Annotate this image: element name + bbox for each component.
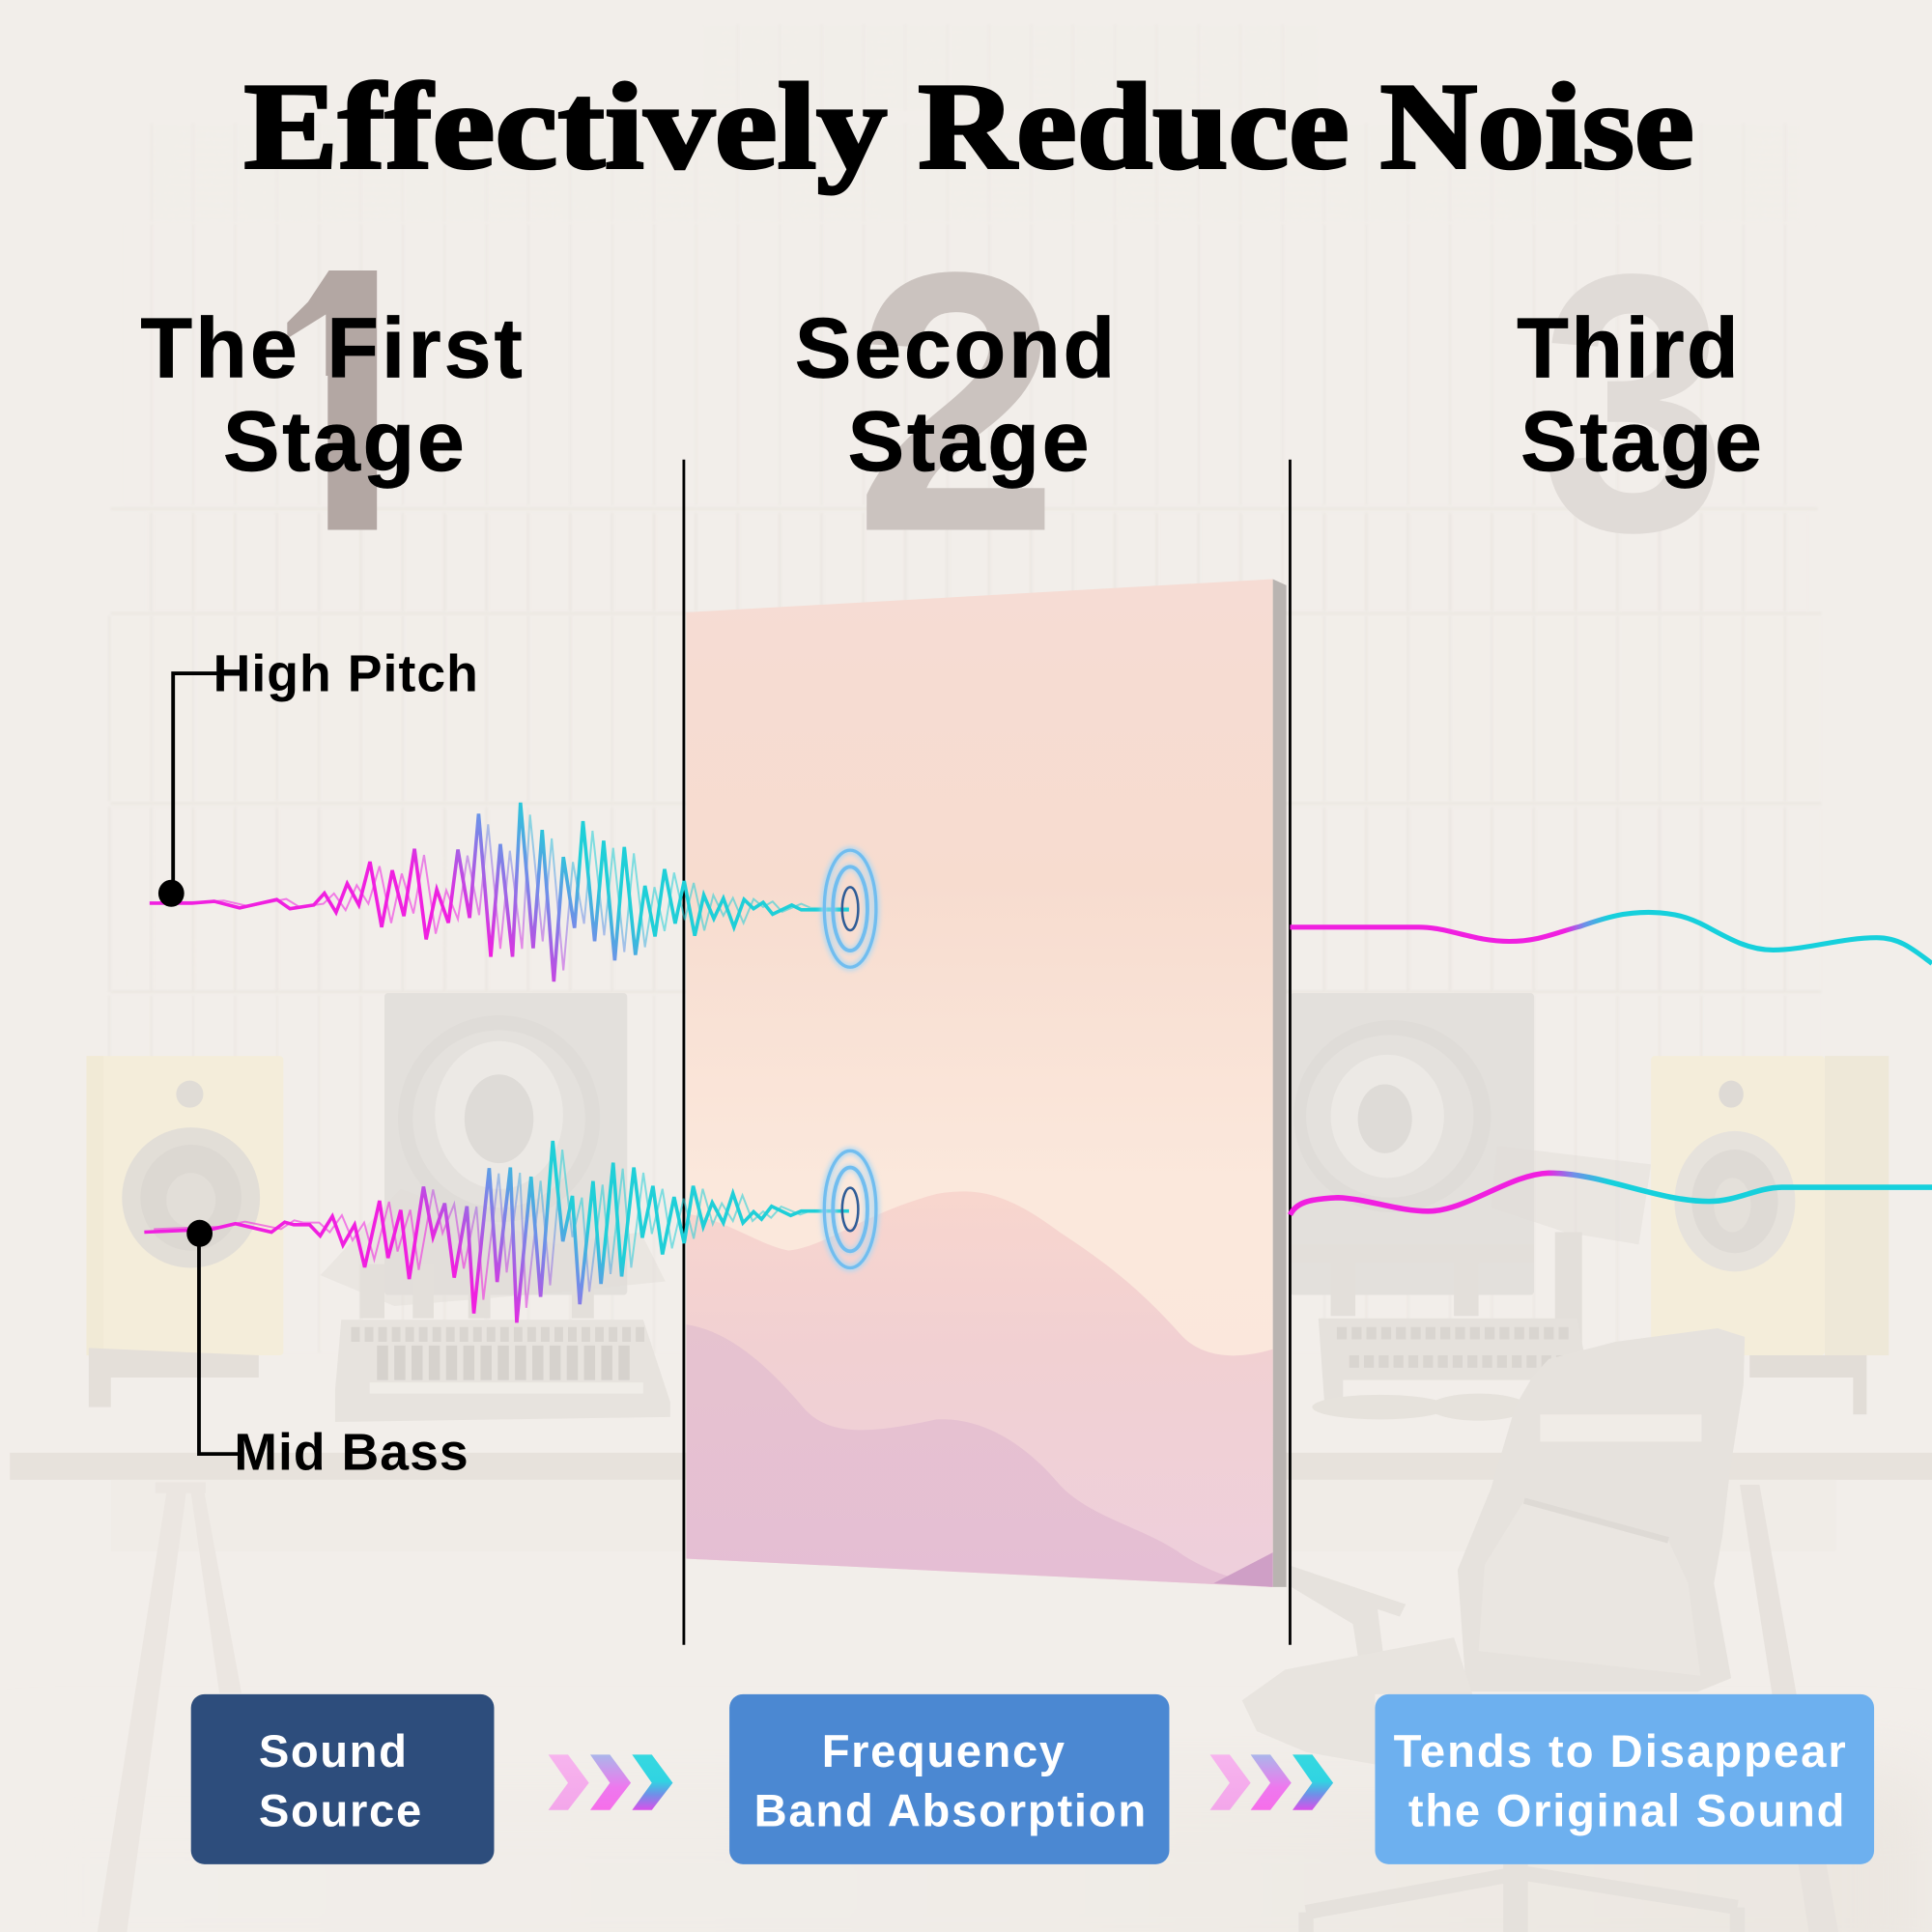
stage number 1: 1 xyxy=(238,188,447,610)
acoustic panel xyxy=(686,579,1287,1587)
stage number 3: 3 xyxy=(1540,197,1727,608)
box: tends to disappear xyxy=(1375,1694,1874,1864)
heading: second stage: Stage xyxy=(848,393,1090,489)
title: Effectively xyxy=(244,57,887,194)
high pitch waveform xyxy=(150,803,849,981)
heading: second stage: Second xyxy=(795,299,1115,395)
left keyboard xyxy=(335,1320,670,1422)
arrows: absorption to disappearing xyxy=(1210,1754,1333,1810)
stage number 2: 2 xyxy=(854,196,1060,609)
heading: first stage xyxy=(140,299,523,489)
box: tends to disappear: Tends to Disappear xyxy=(1394,1726,1846,1777)
residual wave: lower xyxy=(1290,1173,1932,1215)
box: sound source xyxy=(191,1694,494,1864)
title: Reduce xyxy=(918,57,1350,194)
rings: lower absorption point xyxy=(824,1151,876,1267)
desk top xyxy=(10,1453,1932,1480)
box: frequency band absorption: Band Absorption xyxy=(754,1785,1146,1836)
box: sound source: Source xyxy=(259,1785,421,1836)
callout: high pitch: High Pitch xyxy=(213,646,478,703)
right black speaker xyxy=(1290,993,1534,1295)
heading: third stage: Third xyxy=(1517,299,1739,395)
title: Noise xyxy=(1380,57,1694,194)
stage dividers xyxy=(684,460,1290,1645)
heading: first stage: Stage xyxy=(223,393,465,489)
box: sound source: Sound xyxy=(259,1726,407,1777)
right yellow speaker xyxy=(1651,1056,1825,1355)
box: tends to disappear: the Original Sound xyxy=(1408,1785,1844,1836)
callout: mid bass xyxy=(186,1220,469,1482)
residual wave: upper xyxy=(1290,912,1932,963)
left yellow speaker xyxy=(86,1056,283,1355)
rings: upper absorption point xyxy=(824,850,876,967)
mid bass waveform xyxy=(144,1141,849,1322)
desk legs xyxy=(98,1482,242,1932)
heading: first stage: The First xyxy=(140,299,523,395)
left black speaker xyxy=(384,993,627,1295)
title xyxy=(244,57,1694,194)
heading: third stage xyxy=(1517,299,1762,489)
office chair xyxy=(1458,1328,1745,1691)
callout: high pitch xyxy=(158,646,478,907)
box: frequency band absorption xyxy=(729,1694,1169,1864)
arrows: source to absorption xyxy=(549,1754,672,1810)
box: frequency band absorption: Frequency xyxy=(822,1726,1065,1777)
right keyboard and mouse xyxy=(1319,1319,1589,1405)
heading: second stage xyxy=(795,299,1115,489)
callout: mid bass: Mid Bass xyxy=(234,1425,469,1482)
heading: third stage: Stage xyxy=(1520,393,1762,489)
